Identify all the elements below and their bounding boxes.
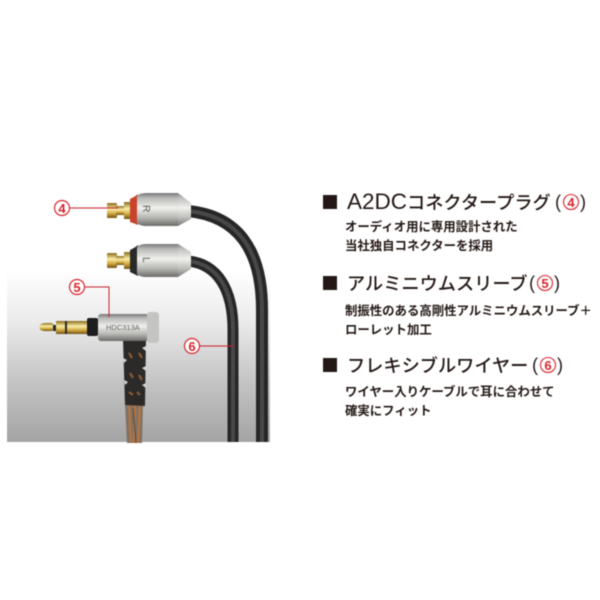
- feature: aluminium sleeve: ローレット加工: [345, 323, 432, 337]
- feature: aluminium sleeve: [323, 273, 592, 337]
- connector: angled jack: HDC313A: [106, 323, 140, 332]
- callout: marker 4: [54, 200, 118, 216]
- cable: braided wire: [125, 404, 143, 443]
- feature: A2DC connector plug: オーディオ用に専用設計された: [345, 219, 518, 234]
- cable: R wire: [188, 211, 262, 442]
- strain relief boot: [123, 339, 146, 406]
- callout: marker 6: 6: [188, 339, 196, 354]
- connector: L plug: [107, 244, 191, 277]
- feature: aluminium sleeve: アルミニウムスリーブ: [347, 273, 528, 294]
- feature: A2DC connector plug: 4: [567, 195, 575, 210]
- connector: angled jack: [39, 312, 159, 343]
- feature: A2DC connector plug: [323, 189, 586, 253]
- feature: A2DC connector plug: ): [580, 192, 586, 212]
- connector: R plug: [107, 193, 191, 226]
- feature: A2DC connector plug: 当社独自コネクターを採用: [345, 238, 493, 253]
- panel: gradient backdrop: [7, 270, 270, 442]
- feature: aluminium sleeve: ): [554, 273, 560, 293]
- feature: aluminium sleeve: 制振性のある高剛性アルミニウムスリーブ＋: [345, 303, 592, 318]
- callout: marker 6: [184, 338, 234, 354]
- cable: L wire: [188, 261, 233, 442]
- feature: flexible wire: [323, 355, 563, 418]
- feature: flexible wire: 確実にフィット: [345, 403, 432, 418]
- connector: L plug: L: [140, 257, 151, 263]
- feature: flexible wire: フレキシブルワイヤー: [347, 355, 528, 376]
- feature: A2DC connector plug: (: [555, 192, 561, 212]
- callout: marker 4: 4: [58, 201, 66, 216]
- callout: marker 5: [70, 280, 109, 317]
- feature: A2DC connector plug: A2DCコネクタープラグ: [347, 189, 551, 214]
- callout: marker 5: 5: [73, 280, 81, 295]
- feature: flexible wire: ): [557, 355, 563, 375]
- feature: aluminium sleeve: 5: [541, 276, 549, 291]
- feature: flexible wire: (: [532, 355, 538, 375]
- connector: R plug: R: [140, 205, 151, 212]
- feature: flexible wire: ワイヤー入りケーブルで耳に合わせて: [345, 384, 555, 399]
- feature: aluminium sleeve: (: [529, 273, 535, 293]
- feature: flexible wire: 6: [544, 358, 552, 373]
